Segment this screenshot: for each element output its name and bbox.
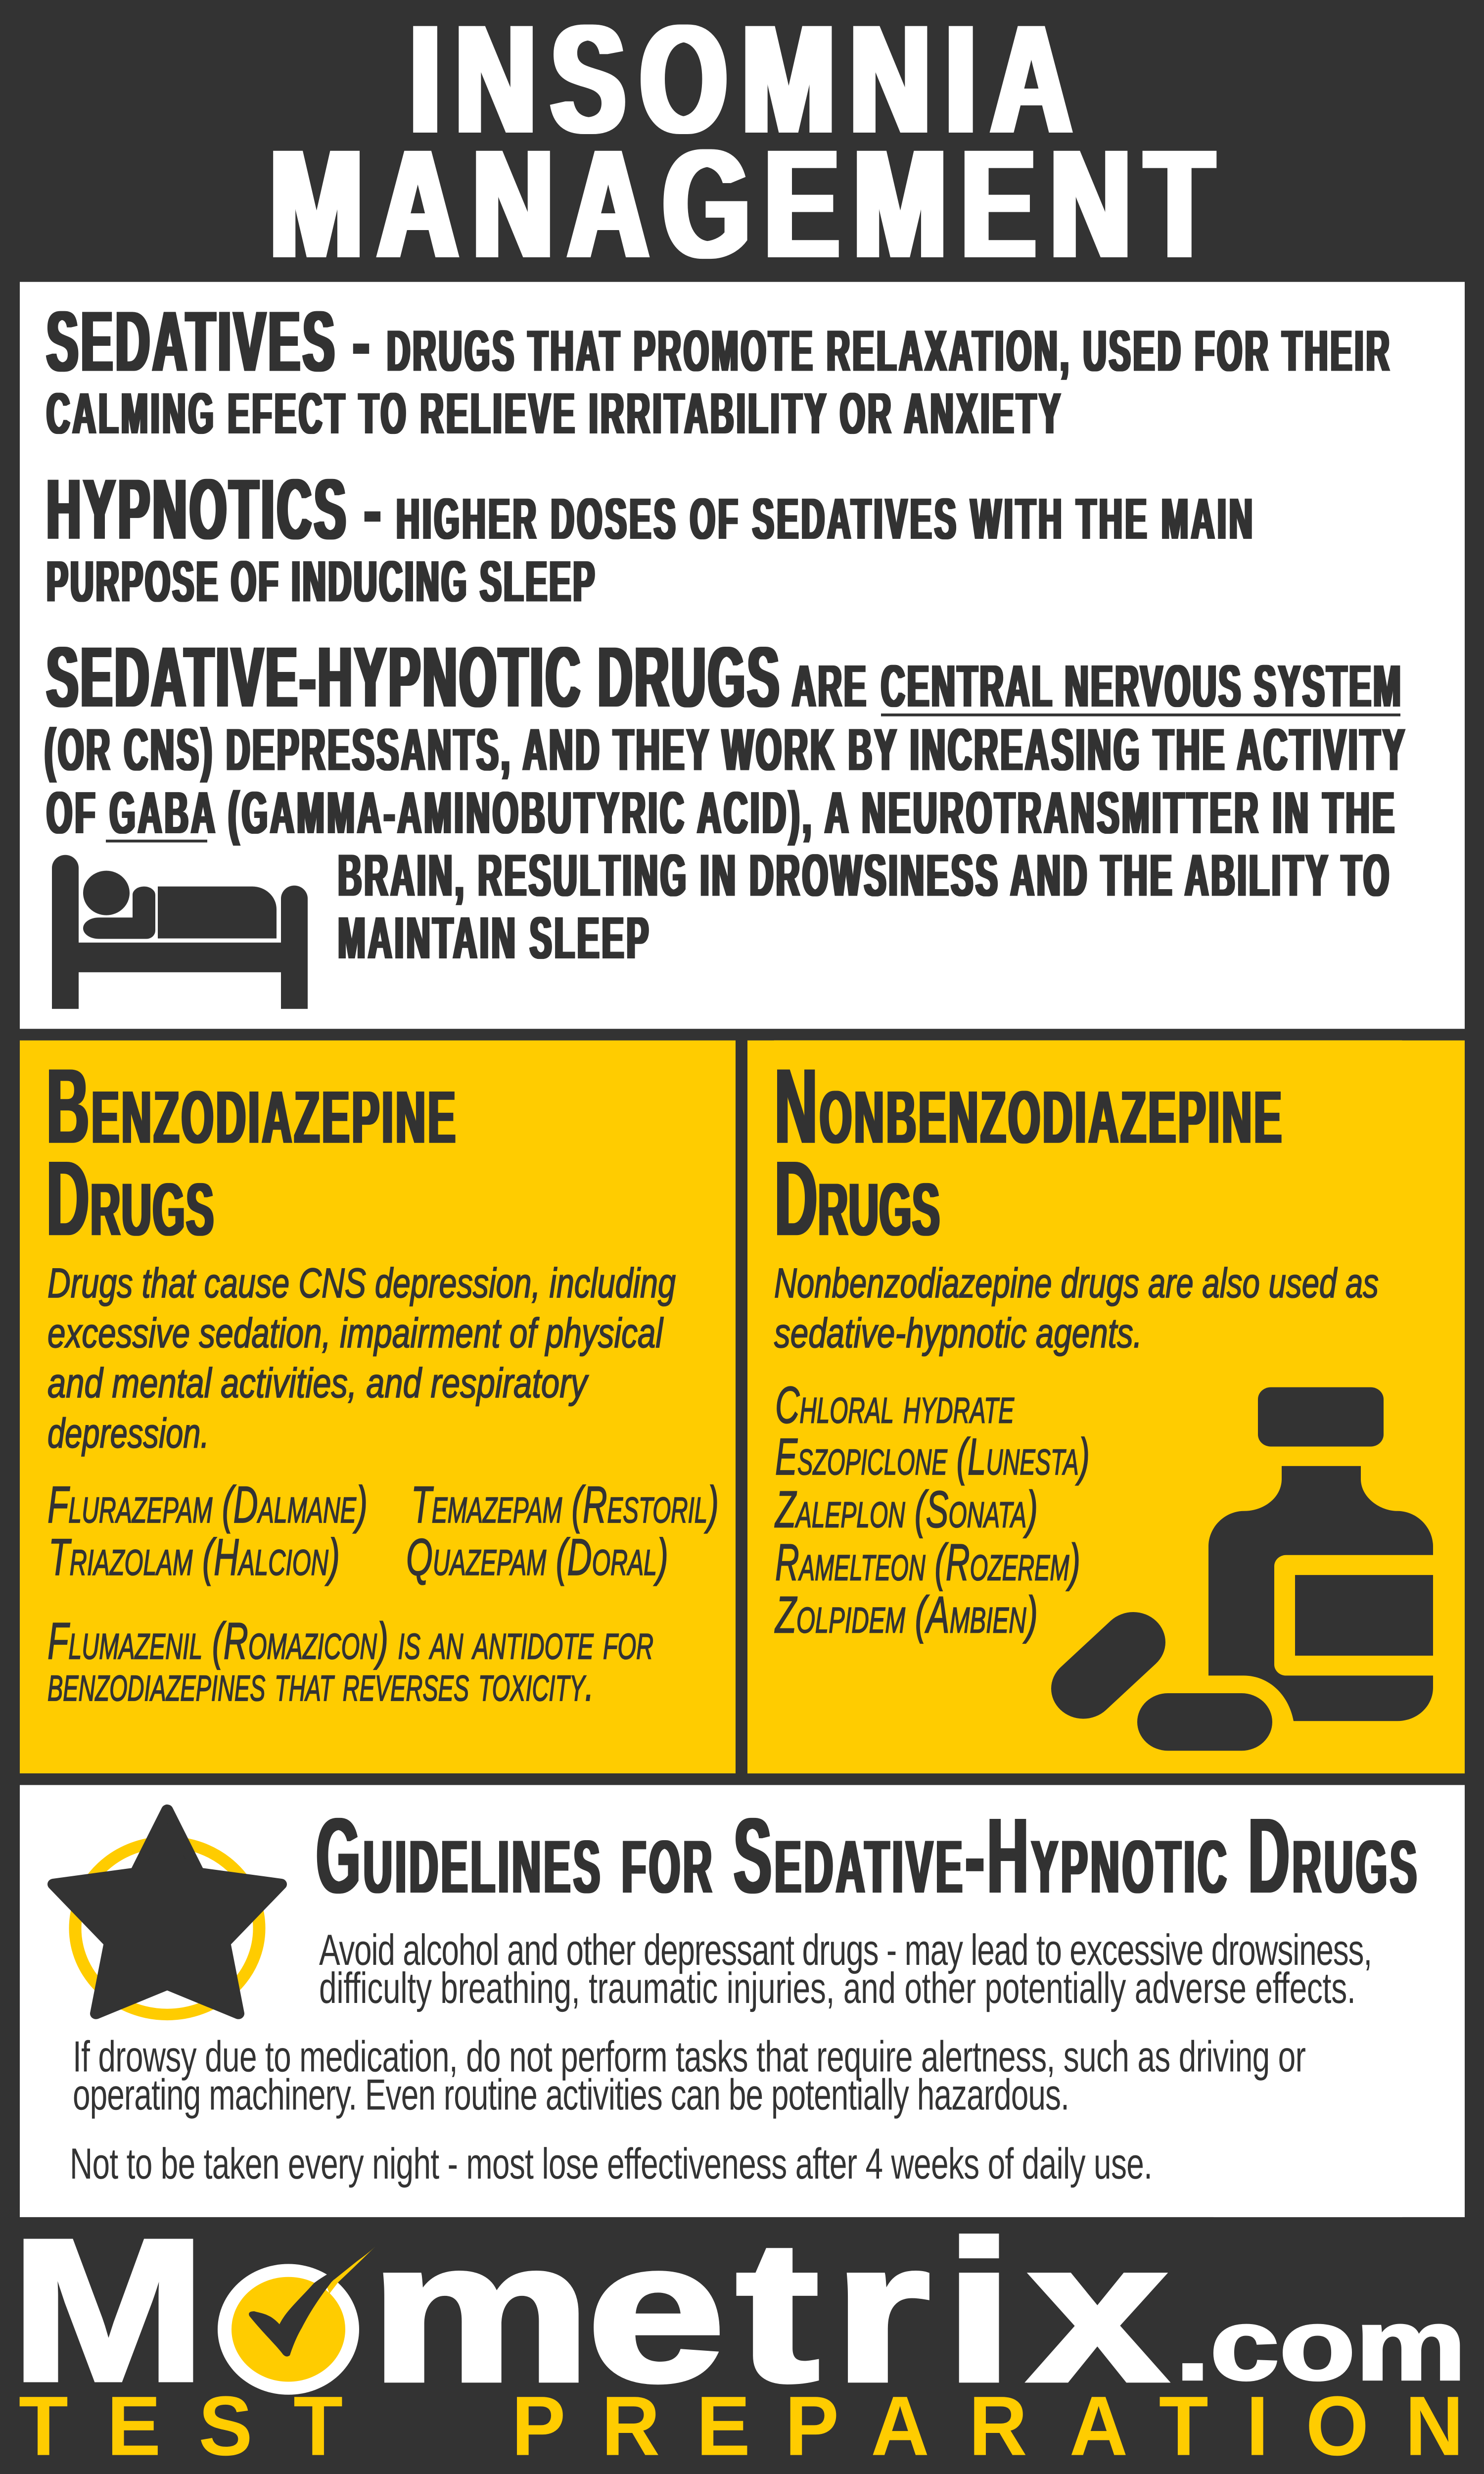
text block: sedatives definition: DRUGS THAT PROMOTE RELAXATION, USED FOR THEIR [387,318,1390,383]
text block: avoid alcohol: difficulty breathing, traumatic injuries, and other potentially adverse effects. [319,1963,1356,2012]
drug list: Zaleplon (Sonata) [774,1480,1038,1538]
drug list: Eszopiclone (Lunesta) [775,1427,1090,1485]
text block: sedative-hypnotic drugs: BRAIN, RESULTING IN DROWSINESS AND THE ABILITY TO [338,842,1389,909]
text block: drowsiness warning [73,2032,1306,2119]
text block: not every night: Not to be taken every night - most lose effectiveness after 4 weeks of daily use. [70,2139,1153,2188]
icon: checkmark circle [218,2247,375,2395]
icon: star with ring [53,1810,281,2014]
text block: drowsiness warning: If drowsy due to medication, do not perform tasks that require alertness, such as driving or [73,2032,1306,2081]
wordmark: metrix [370,2200,1168,2423]
tagline: TEST PREPARATION [19,2379,1464,2473]
drug list [47,1476,719,1586]
text block: drowsiness warning: operating machinery. Even routine activities can be potentially hazardous. [73,2070,1069,2119]
text block: hypnotics definition: HYPNOTICS - [46,462,380,557]
drug list: Ramelteon (Rozerem) [775,1533,1080,1591]
icon: person in bed [52,855,308,1009]
panel: definitions [20,282,1465,1029]
wordmark [10,2196,1466,2424]
drug list: Chloral hydrate [775,1376,1015,1434]
text block: sedatives definition: SEDATIVES - [46,294,369,389]
text block: description: excessive sedation, impairment of physical [47,1310,664,1357]
text block: description [774,1260,1379,1357]
text block: sedative-hypnotic drugs: CENTRAL NERVOUS SYSTEM [881,653,1401,719]
antidote note [47,1612,653,1712]
heading: benzodiazepine drugs [46,1047,456,1258]
text block: description: Drugs that cause CNS depression, including [47,1260,676,1307]
panel: guidelines [20,1785,1465,2217]
text block: sedative-hypnotic drugs: OF GABA (GAMMA-AMINOBUTYRIC ACID), A NEUROTRANSMITTER IN THE [46,779,1394,846]
text block: hypnotics definition: PURPOSE OF INDUCING SLEEP [46,549,595,614]
text block: sedative-hypnotic drugs: SEDATIVE-HYPNOTIC DRUGS [46,629,779,725]
text block: description: and mental activities, and respiratory [47,1360,589,1407]
heading: nonbenzodiazepine drugs: Drugs [775,1139,940,1258]
text block: sedatives definition [46,294,1390,446]
heading: nonbenzodiazepine drugs [775,1047,1282,1258]
heading: benzodiazepine drugs: Drugs [46,1139,214,1258]
wordmark: .com [1175,2288,1466,2401]
text block: description [47,1260,676,1457]
text block: hypnotics definition [46,462,1252,614]
text block: description: depression. [47,1410,209,1457]
drug list: Flurazepam (Dalmane) [47,1476,368,1534]
heading: nonbenzodiazepine drugs: Nonbenzodiazepine [775,1047,1282,1166]
title [270,0,1214,290]
heading: guidelines: Guidelines for Sedative-Hypnotic Drugs [316,1796,1417,1915]
antidote note: Flumazenil (Romazicon) is an antidote for [47,1612,653,1670]
text block: sedative-hypnotic drugs: ARE [792,653,866,719]
text block: sedative-hypnotic drugs: (OR CNS) DEPRESSANTS, AND THEY WORK BY INCREASING THE ACTIVITY [45,716,1405,783]
drug list: Zolpidem (Ambien) [774,1586,1038,1644]
antidote note: benzodiazepines that reverses toxicity. [47,1654,594,1712]
text block: hypnotics definition: HIGHER DOSES OF SEDATIVES WITH THE MAIN [396,486,1252,551]
text block: avoid alcohol: Avoid alcohol and other depressant drugs - may lead to excessive drowsiness, [319,1925,1372,1974]
panel: nonbenzodiazepine drugs [747,1041,1465,1773]
logo: Mometrix test preparation [10,2196,1466,2473]
heading: benzodiazepine drugs: Benzodiazepine [46,1047,456,1166]
panel: benzodiazepine drugs [20,1041,736,1773]
text block: sedative-hypnotic drugs [45,629,1405,971]
drug list: Temazepam (Restoril) [411,1476,719,1534]
text block: avoid alcohol [319,1925,1372,2012]
title: MANAGEMENT [270,117,1214,290]
text block: sedatives definition: CALMING EFECT TO RELIEVE IRRITABILITY OR ANXIETY [46,381,1061,446]
text block: description: sedative-hypnotic agents. [774,1310,1142,1357]
wordmark: M [10,2196,207,2424]
drug list: Quazepam (Doral) [406,1528,668,1586]
drug list [774,1376,1090,1644]
icon: pill bottle and pills [1083,1387,1433,1751]
drug list: Triazolam (Halcion) [48,1528,340,1586]
text block: sedative-hypnotic drugs: MAINTAIN SLEEP [338,904,649,971]
